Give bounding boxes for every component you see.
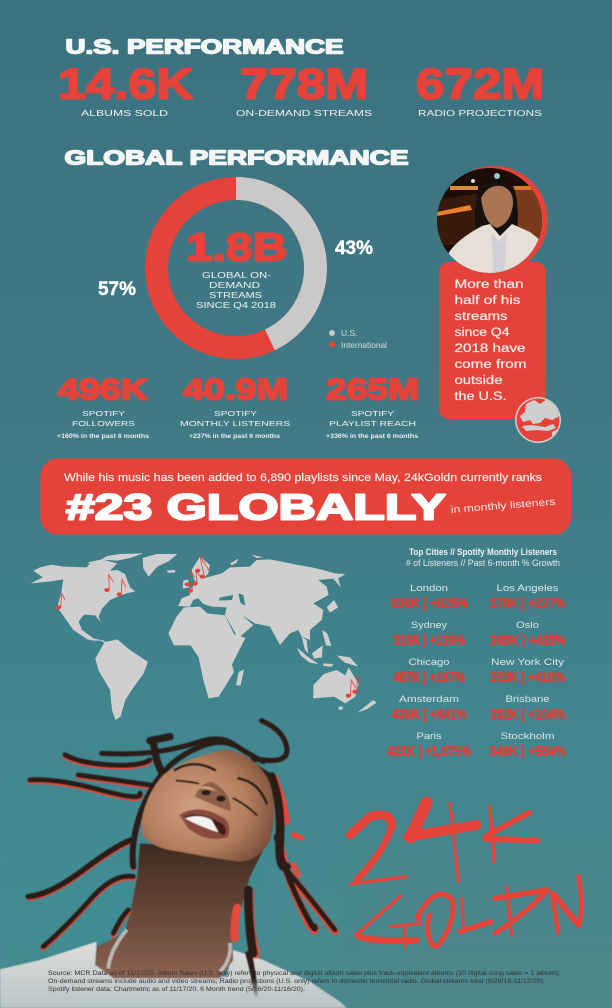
face <box>142 749 274 862</box>
Japan <box>327 600 338 613</box>
donut caption <box>196 271 276 310</box>
Greenland <box>143 554 177 577</box>
music notes <box>56 557 361 698</box>
city: Paris: Paris <box>416 731 442 741</box>
city: Stockholm <box>489 731 566 760</box>
source footnote: Spotify listener data: Chartmetric as of 11/17/20. 6 Month trend (5/16/20-11/16/20). <box>48 986 305 993</box>
stat: Spotify monthly listeners: MONTHLY LISTENERS <box>180 419 290 428</box>
city: Brisbane: Brisbane <box>506 694 550 704</box>
cities title: # of Listeners // Past 6-month % Growth <box>406 558 560 568</box>
brows and eyes <box>175 764 267 815</box>
Madagascar <box>236 669 244 685</box>
stat: Spotify followers: FOLLOWERS <box>72 419 135 428</box>
stat: Spotify playlist reach: +336% in the past 6 months <box>326 433 419 440</box>
stat: Spotify followers: 496K <box>58 374 148 406</box>
city: Oslo: 365K | +435% <box>490 633 566 649</box>
Eurasia <box>178 557 345 645</box>
city: Oslo: Oslo <box>516 620 539 630</box>
panel: U.S. stats <box>58 60 544 118</box>
legend <box>329 328 387 350</box>
callout text: streams <box>454 311 508 323</box>
banner sentence: While his music has been added to 6,890 playlists since May, 24kGoldn currently ranks <box>64 472 543 484</box>
Arctic islands <box>87 553 175 573</box>
stat: Spotify monthly listeners: SPOTIFY <box>214 409 257 418</box>
callout text: half of his <box>454 295 521 307</box>
logo: 24K GOLDN handwritten <box>350 803 581 947</box>
donut chart: global streams <box>156 188 316 348</box>
stat: Spotify playlist reach: SPOTIFY <box>351 409 394 418</box>
city: Amsterdam <box>392 694 467 723</box>
source footnote: On-demand streams include audio and video streams; Radio projections (U.S. only) refers to domestic terrestrial radio. Global streams total (9/28/18-11/12/20). <box>48 978 545 985</box>
stat: on-demand streams: ON-DEMAND STREAMS <box>236 109 372 118</box>
stat: Spotify playlist reach <box>326 374 419 440</box>
stat: on-demand streams: 778M <box>240 60 368 108</box>
city: London: London <box>410 583 448 593</box>
stat: Spotify monthly listeners <box>180 374 290 440</box>
callout text: More than <box>454 279 524 291</box>
city: Brisbane <box>490 694 565 723</box>
stat: Spotify followers: +160% in the past 6 months <box>57 433 150 440</box>
donut value: 1.8B <box>186 226 287 270</box>
city: Amsterdam: Amsterdam <box>399 694 459 704</box>
Africa <box>168 607 245 698</box>
city: Chicago: 487K | +167% <box>393 670 465 686</box>
hair strand fading into shirt <box>245 950 258 997</box>
stat: Spotify followers <box>57 374 150 440</box>
Australia <box>313 667 359 710</box>
heading: global performance: GLOBAL PERFORMANCE <box>64 148 408 170</box>
New Zealand <box>357 700 377 713</box>
stat: on-demand streams <box>236 60 372 118</box>
city: Paris <box>387 731 471 760</box>
city: Chicago: Chicago <box>408 657 450 667</box>
stat: albums sold: ALBUMS SOLD <box>81 109 169 118</box>
city: Stockholm: 349K | +584% <box>489 744 566 760</box>
shirt <box>0 942 347 1008</box>
panel: Spotify stats <box>57 374 419 440</box>
source footnote <box>48 970 560 993</box>
callout text <box>454 279 526 403</box>
city: Amsterdam: 439K | +641% <box>392 707 467 723</box>
stat: Spotify playlist reach: 265M <box>326 374 419 406</box>
portrait photo <box>437 168 543 274</box>
city: Sydney: 519K | +139% <box>393 633 465 649</box>
nose <box>195 782 231 812</box>
donut caption: DEMAND <box>209 281 261 290</box>
inland seas <box>219 593 245 605</box>
Russian Arctic islands <box>230 555 263 565</box>
necklace <box>108 930 230 972</box>
hair locks <box>28 721 335 953</box>
city: London <box>391 583 468 612</box>
stat: Spotify monthly listeners: +237% in the past 6 months <box>189 433 281 440</box>
callout text: 2018 have <box>454 343 526 355</box>
stat: Spotify monthly listeners: 40.9M <box>183 374 288 406</box>
neck <box>96 843 263 978</box>
city: New York City: 353K | +410% <box>490 670 565 686</box>
city: Stockholm: Stockholm <box>500 731 554 741</box>
cities title: Top Cities // Spotify Monthly Listeners <box>409 547 557 557</box>
panel: top cities <box>387 547 566 760</box>
city: Oslo <box>490 620 566 649</box>
city: Brisbane: 352K | +104% <box>490 707 565 723</box>
city: Sydney: Sydney <box>411 620 448 630</box>
legend: U.S. <box>341 328 358 338</box>
city: Los Angeles <box>490 583 565 612</box>
donut caption: STREAMS <box>209 291 262 300</box>
callout text: outside <box>454 375 502 387</box>
cities title <box>406 547 560 568</box>
stat: radio projections: RADIO PROJECTIONS <box>418 109 542 118</box>
city: New York City <box>490 657 565 686</box>
callout text: come from <box>454 359 526 371</box>
Malay peninsula <box>302 637 308 653</box>
stat: albums sold: 14.6K <box>58 60 193 108</box>
stat: Spotify playlist reach: PLAYLIST REACH <box>329 419 416 428</box>
stat: radio projections: 672M <box>416 60 544 108</box>
city: Los Angeles: Los Angeles <box>496 583 559 593</box>
city: Los Angeles: 378K | +227% <box>490 596 565 612</box>
banner: global rank <box>40 458 571 534</box>
heading: U.S. performance: U.S. PERFORMANCE <box>66 36 344 58</box>
city: Paris: 422K | +1,075% <box>387 744 471 760</box>
callout text: since Q4 <box>454 327 510 339</box>
icon: globe <box>515 397 561 443</box>
panel: callout with portrait <box>437 166 548 419</box>
label: 57 percent: 57% <box>98 279 136 300</box>
city: Sydney <box>393 620 465 649</box>
donut caption: SINCE Q4 2018 <box>196 301 276 310</box>
banner suffix: in monthly listeners <box>450 497 556 516</box>
source footnote: Source: MCR Data as of 11/12/20. Album Sales (U.S. only) refers to physical and digital album sales plus track-equivalent albums (10 digital song sales = 1 album); <box>48 970 560 977</box>
British Isles <box>183 579 189 589</box>
city: London: 630K | +625% <box>391 596 468 612</box>
world map <box>31 553 377 720</box>
callout text: the U.S. <box>454 391 506 403</box>
donut caption: GLOBAL ON- <box>202 271 272 280</box>
banner headline: #23 GLOBALLY <box>66 486 446 528</box>
city: New York City: New York City <box>491 657 565 667</box>
city: Chicago <box>393 657 465 686</box>
Southeast Asia islands <box>297 630 358 667</box>
mouth <box>179 809 229 839</box>
stat: Spotify followers: SPOTIFY <box>82 409 125 418</box>
label: 43 percent: 43% <box>335 238 373 259</box>
hair underlay red <box>28 756 335 955</box>
legend: International <box>341 340 387 350</box>
South America <box>95 639 148 720</box>
North America <box>31 561 135 645</box>
portrait: artist with dreadlocks <box>0 721 347 1008</box>
